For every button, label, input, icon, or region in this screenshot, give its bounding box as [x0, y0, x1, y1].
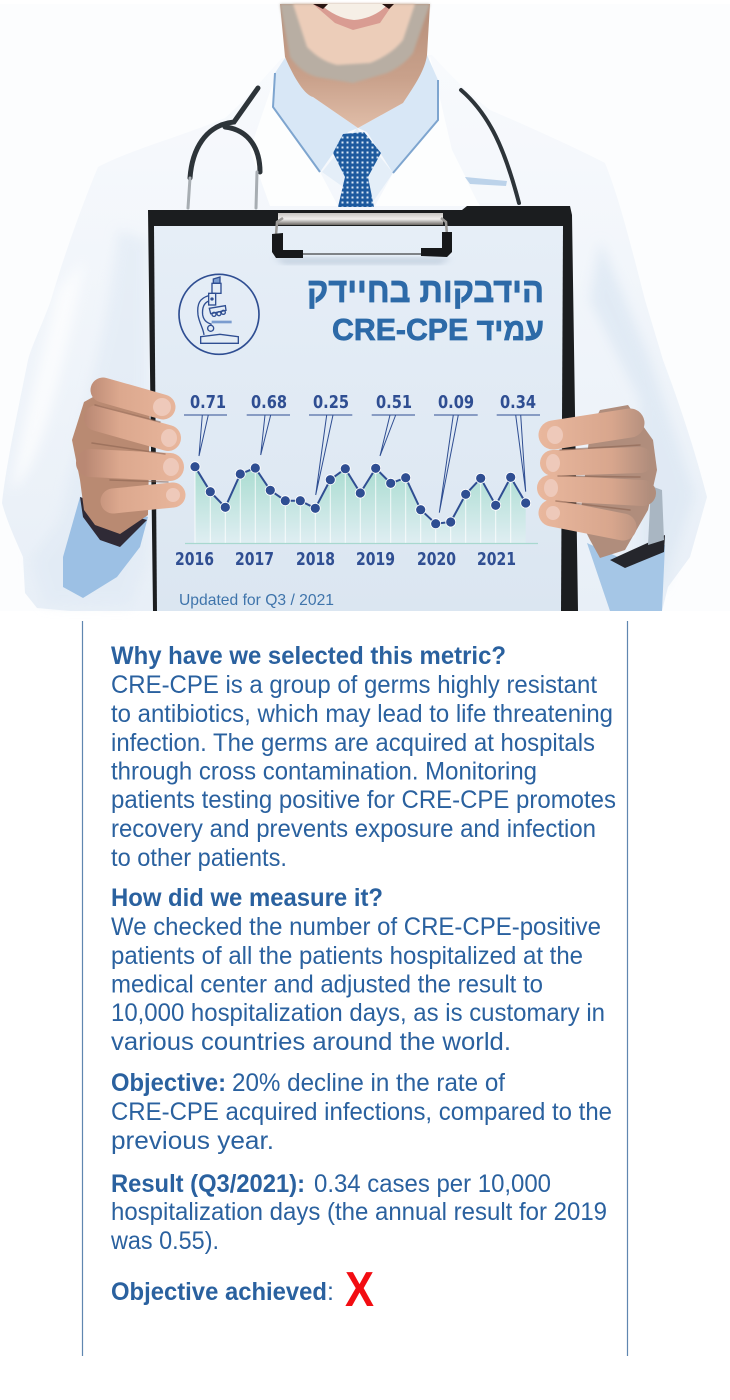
callout leaders [184, 415, 540, 513]
text block: how measured: How did we measure it? [111, 884, 383, 912]
title: Hebrew heading [307, 271, 544, 347]
year axis labels: 2017 [235, 550, 274, 570]
panel: text frame rules [82, 621, 628, 1356]
metal clip [272, 213, 452, 258]
text block: result: hospitalization days (the annual result for 2019 [111, 1198, 607, 1226]
year axis labels [175, 550, 516, 570]
text block: how measured: patients of all the patients hospitalized at the [111, 942, 583, 970]
fingernails [544, 426, 563, 520]
text block: objective [111, 1069, 612, 1155]
callout values: 0.09 [438, 392, 474, 413]
text block: why selected: patients testing positive for CRE-CPE promotes [111, 786, 616, 814]
stethoscope [188, 88, 519, 208]
text block: why selected [111, 642, 616, 872]
callout values: 0.71 [190, 392, 226, 413]
callout values: 0.68 [251, 392, 287, 413]
shirt collar [273, 55, 438, 206]
title: Hebrew heading: הידבקות בחיידק [307, 271, 544, 310]
icon: microscope [179, 274, 259, 354]
clipboard paper [154, 226, 563, 611]
text block: result: Result (Q3/2021): [111, 1170, 305, 1198]
text block: how measured: We checked the number of CRE-CPE-positive [111, 913, 601, 941]
year axis labels: 2019 [356, 550, 395, 570]
text block: result: was 0.55). [110, 1227, 219, 1255]
data line [195, 467, 526, 524]
clipboard [148, 206, 578, 611]
necktie [333, 132, 381, 207]
text block: how measured [111, 884, 605, 1056]
year axis labels: 2018 [296, 550, 335, 570]
clip shadow [273, 258, 452, 264]
text block: objective achieved: : [327, 1278, 334, 1306]
coat pocket [465, 177, 516, 203]
chart: CRE-CPE rate line chart 2016-2021 [175, 392, 540, 570]
text block: why selected: to other patients. [111, 844, 287, 872]
mouth [313, 4, 394, 30]
face and neck [280, 4, 430, 128]
text block: objective: CRE-CPE acquired infections, compared to the [111, 1098, 612, 1126]
text block: objective: previous year. [111, 1127, 274, 1155]
callout values: 0.51 [376, 392, 412, 413]
text block: why selected: CRE-CPE is a group of germs highly resistant [111, 671, 597, 699]
callout values: 0.25 [313, 392, 349, 413]
text block: why selected: recovery and prevents exposure and infection [111, 815, 596, 843]
year axis labels: 2020 [417, 550, 456, 570]
text block: result [110, 1170, 607, 1255]
doctor's white coat [2, 55, 707, 611]
text block: how measured: medical center and adjusted the result to [111, 970, 543, 998]
text block: result: 0.34 cases per 10,000 [314, 1170, 551, 1198]
text block: why selected: infection. The germs are acquired at hospitals [111, 729, 595, 757]
left shirt cuff [63, 497, 148, 598]
photo: doctor holding clipboard [0, 4, 730, 611]
text block: objective: Objective: [111, 1069, 226, 1097]
callout values [190, 392, 536, 413]
left hand [72, 382, 180, 534]
text block: how measured: 10,000 hospitalization days, as is customary in [111, 999, 605, 1027]
chart area fill [195, 467, 526, 543]
title: Hebrew heading: עמיד CRE-CPE [332, 312, 544, 347]
right hand [544, 405, 657, 558]
icon: red X: X [345, 1263, 374, 1317]
year axis labels: 2016 [175, 550, 214, 570]
right shirt cuff and watch [587, 486, 665, 611]
data points [190, 462, 531, 529]
text block: objective achieved: Objective achieved [111, 1278, 327, 1306]
update note: Updated for Q3 / 2021 [179, 592, 334, 609]
text block: why selected: to antibiotics, which may lead to life threatening [111, 700, 613, 728]
callout values: 0.34 [500, 392, 536, 413]
text block: how measured: various countries around the world. [111, 1028, 511, 1056]
text block: why selected: Why have we selected this metric? [111, 642, 506, 670]
year axis labels: 2021 [477, 550, 516, 570]
text block: objective: 20% decline in the rate of [232, 1069, 505, 1097]
text block: why selected: through cross contamination. Monitoring [111, 758, 537, 786]
fingernails [153, 398, 180, 502]
